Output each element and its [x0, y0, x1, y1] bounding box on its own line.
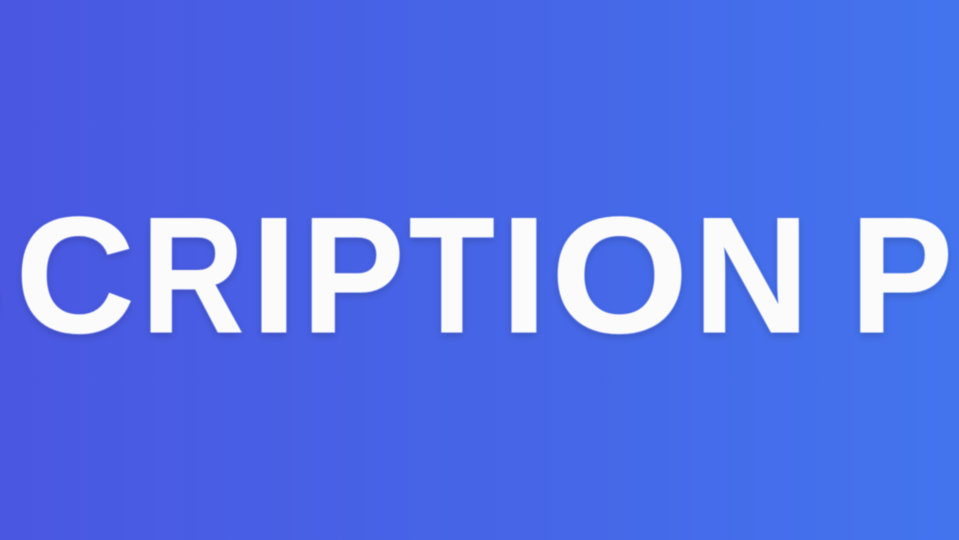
- title: cropped subscription plans heading: I: [251, 183, 297, 367]
- title: cropped subscription plans heading: R: [142, 183, 244, 367]
- title: cropped subscription plans heading: T: [409, 183, 495, 368]
- title: cropped subscription plans heading: N: [694, 184, 809, 368]
- title: cropped subscription plans heading: C: [16, 183, 135, 367]
- title: cropped subscription plans heading: O: [551, 183, 688, 368]
- title: cropped subscription plans heading: P: [850, 183, 953, 367]
- title: cropped subscription plans heading: I: [501, 183, 547, 367]
- title: cropped subscription plans heading: P: [302, 183, 404, 367]
- title: cropped subscription plans heading: [0, 183, 953, 368]
